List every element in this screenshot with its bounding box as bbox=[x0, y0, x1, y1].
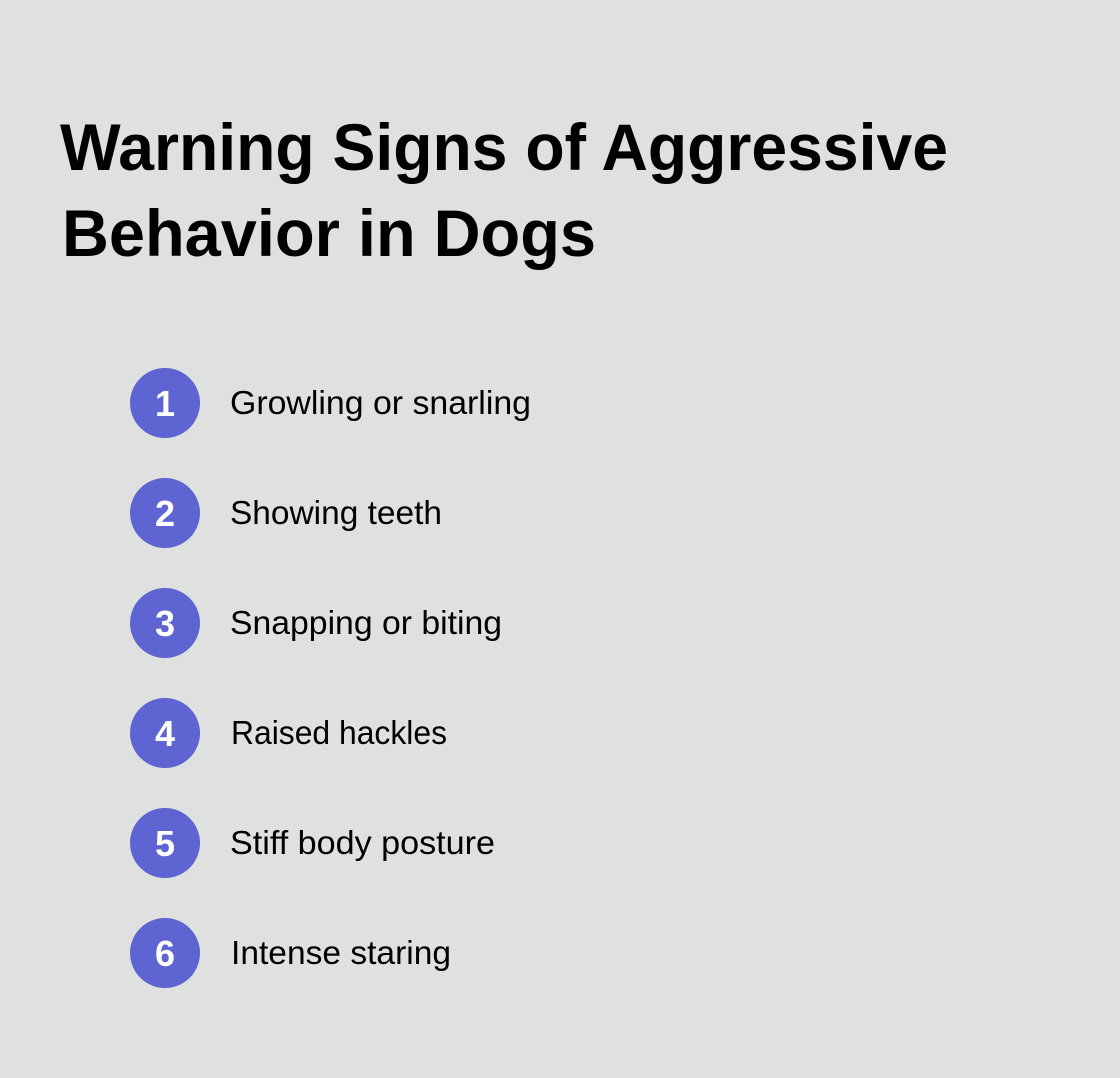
item 6: intense staring: Intense staring bbox=[231, 934, 451, 971]
item 6: intense staring bbox=[130, 918, 451, 988]
item 5: stiff body posture: Stiff body posture bbox=[230, 824, 495, 861]
item 5: stiff body posture bbox=[130, 808, 495, 878]
item 1: growling or snarling: Growling or snarling bbox=[230, 384, 531, 421]
item 6: intense staring: 6 bbox=[155, 933, 175, 974]
item 5: stiff body posture: 5 bbox=[155, 823, 175, 864]
item 2: showing teeth: Showing teeth bbox=[230, 494, 442, 531]
item 3: snapping or biting bbox=[130, 588, 502, 658]
item 3: snapping or biting: Snapping or biting bbox=[230, 604, 502, 641]
item 3: snapping or biting: 3 bbox=[155, 603, 175, 644]
title: Warning Signs of Aggressive bbox=[60, 110, 948, 184]
item 1: growling or snarling bbox=[130, 368, 531, 438]
title: Behavior in Dogs bbox=[62, 196, 596, 270]
item 2: showing teeth: 2 bbox=[155, 493, 175, 534]
title bbox=[60, 110, 948, 270]
item 2: showing teeth bbox=[130, 478, 442, 548]
item 4: raised hackles: Raised hackles bbox=[231, 714, 447, 751]
list of warning signs bbox=[130, 368, 531, 988]
item 1: growling or snarling: 1 bbox=[155, 383, 175, 424]
item 4: raised hackles: 4 bbox=[155, 713, 175, 754]
item 4: raised hackles bbox=[130, 698, 447, 768]
